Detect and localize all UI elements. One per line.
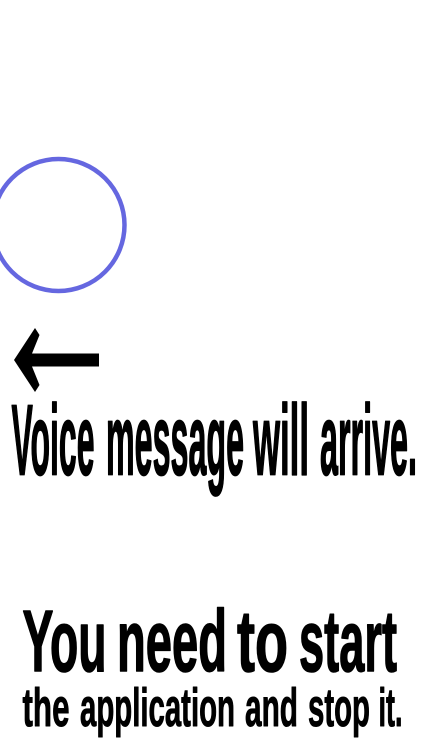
text block: the application and stop it: stop <box>308 678 370 738</box>
text block: the application and stop it: the <box>22 678 70 738</box>
heading: voice message: will <box>253 384 309 496</box>
icon: purple circle <box>0 159 124 291</box>
heading: you need to start: You <box>22 593 106 690</box>
heading: you need to start: to <box>237 593 288 690</box>
icon: left arrow <box>14 328 99 392</box>
heading: voice message: Voice <box>12 384 94 496</box>
heading: you need to start: need <box>117 593 227 690</box>
text block: the application and stop it: application <box>80 678 235 738</box>
text block: the application and stop it: and <box>245 678 298 738</box>
